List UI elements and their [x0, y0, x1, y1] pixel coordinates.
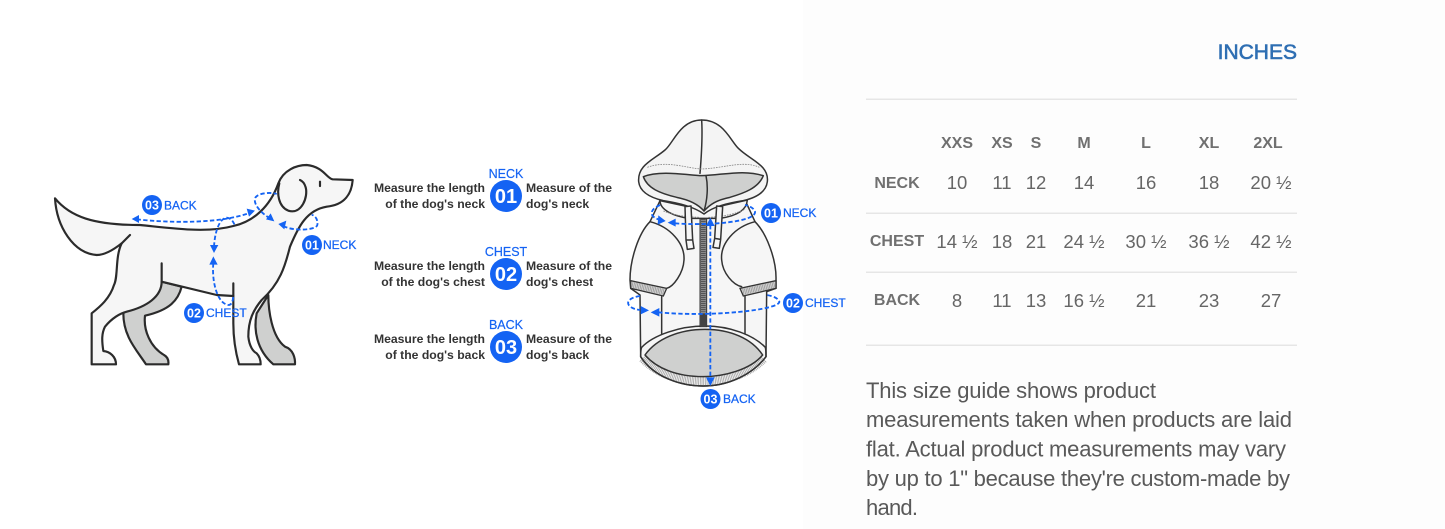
table row: chest: 42 ½ — [1250, 231, 1292, 252]
hoodie hem rib — [643, 358, 764, 381]
size guide note: by up to 1" because they're custom-made by — [866, 466, 1290, 491]
table row: neck: NECK — [874, 175, 920, 192]
instruction: back — [374, 318, 612, 363]
left drawstring — [685, 206, 694, 249]
badge: 02 chest — [783, 293, 846, 313]
table row: chest: 14 ½ — [936, 231, 978, 252]
size guide note — [866, 378, 1292, 520]
table row: neck: 10 — [947, 172, 967, 193]
size guide note: This size guide shows product — [866, 378, 1156, 403]
neck arrow — [652, 205, 755, 227]
table row: chest: 18 — [992, 231, 1012, 252]
dog eye — [317, 182, 323, 186]
instruction: chest: dog's chest — [526, 275, 593, 289]
hoodie zipper — [700, 218, 707, 327]
instruction: neck: dog's neck — [526, 197, 589, 211]
instruction: chest: of the dog's chest — [381, 275, 485, 289]
illustration: dog with measurement guides — [55, 165, 356, 364]
table row: neck: 14 — [1074, 172, 1094, 193]
hoodie hem opening — [645, 329, 763, 377]
right drawstring — [713, 206, 723, 248]
size guide note: measurements taken when products are laid — [866, 407, 1292, 432]
instruction: neck: NECK — [489, 167, 524, 181]
table header row: M — [1077, 135, 1091, 152]
table row: chest: 24 ½ — [1063, 231, 1105, 252]
table header row: 2XL — [1253, 135, 1283, 152]
table row: back: 8 — [952, 290, 962, 311]
instruction: back: dog's back — [526, 348, 589, 362]
badge: 01 neck: NECK — [323, 238, 356, 252]
hood seams — [700, 120, 707, 211]
chest arrow — [209, 218, 235, 305]
badge: 02 chest: CHEST — [805, 296, 846, 310]
table row: back: 11 — [992, 290, 1012, 311]
table row: chest: 30 ½ — [1125, 231, 1167, 252]
legend: measurement instructions — [374, 167, 612, 363]
hoodie sleeve lines — [650, 222, 755, 333]
heading: inches: INCHES — [1218, 41, 1297, 64]
instruction: chest: 02 — [495, 264, 517, 286]
badge: 03 back: 03 — [145, 198, 159, 212]
hoodie hem outline — [641, 326, 766, 386]
badge: 03 back: BACK — [723, 392, 756, 406]
dog ear — [278, 180, 306, 211]
badge: 01 neck — [302, 235, 356, 255]
left cuff — [631, 281, 667, 296]
table row: neck: 18 — [1199, 172, 1219, 193]
back arrow — [132, 209, 255, 223]
table row: neck: 16 — [1136, 172, 1156, 193]
hood — [639, 120, 767, 214]
size table — [866, 98, 1297, 346]
table row: chest: 21 — [1026, 231, 1046, 252]
table row: back: BACK — [874, 292, 921, 309]
table header row: S — [1031, 135, 1042, 152]
badge: 03 back: 03 — [704, 392, 717, 406]
size guide note: hand. — [866, 495, 918, 520]
hoodie body — [630, 200, 776, 386]
instruction: back: 03 — [495, 337, 517, 359]
badge: 01 neck: NECK — [783, 206, 816, 220]
back arrow — [706, 218, 715, 386]
instruction: neck: of the dog's neck — [385, 197, 485, 211]
illustration: hoodie with measurement guides — [628, 120, 846, 409]
neck arrow — [255, 193, 318, 230]
badge: 03 back — [700, 389, 756, 409]
instruction: neck: Measure of the — [526, 181, 612, 195]
table row: back: 16 ½ — [1063, 290, 1105, 311]
table header row: XL — [1199, 135, 1219, 152]
table row: neck: 20 ½ — [1250, 172, 1292, 193]
table row: back: 27 — [1261, 290, 1281, 311]
table row: chest — [870, 231, 1292, 252]
instruction: neck: 01 — [495, 186, 517, 208]
table row: back: 23 — [1199, 290, 1219, 311]
hood opening — [643, 173, 763, 211]
badge: 02 chest: 02 — [187, 306, 201, 320]
instruction: neck: Measure the length — [374, 181, 485, 195]
size guide note: flat. Actual product measurements may vary — [866, 436, 1286, 462]
table row: neck — [874, 172, 1292, 193]
badge: 02 chest — [184, 303, 247, 323]
table row: chest: 36 ½ — [1188, 231, 1230, 252]
table row: neck: 11 — [992, 172, 1012, 193]
instruction: neck — [374, 167, 612, 212]
instruction: chest: CHEST — [485, 245, 528, 259]
table row: neck: 12 — [1026, 172, 1046, 193]
table header row — [941, 135, 1283, 152]
instruction: back: Measure of the — [526, 332, 612, 346]
right cuff — [740, 281, 776, 296]
instruction: chest: Measure the length — [374, 259, 485, 273]
badge: 01 neck: 01 — [305, 238, 319, 252]
dog hind far leg — [123, 282, 182, 364]
badge: 03 back: BACK — [164, 198, 197, 212]
dog front far leg — [256, 295, 295, 364]
badge: 01 neck: 01 — [764, 206, 778, 220]
instruction: chest: Measure of the — [526, 259, 612, 273]
hoodie collar — [660, 200, 747, 218]
badge: 02 chest: CHEST — [206, 306, 247, 320]
table header row: XS — [991, 135, 1013, 152]
table header row: XXS — [941, 135, 973, 152]
dog body — [55, 165, 353, 364]
table header row: L — [1141, 135, 1151, 152]
table row: chest: CHEST — [870, 233, 924, 250]
instruction: chest — [374, 245, 612, 290]
badge: 01 neck — [761, 203, 816, 223]
table row: back: 13 — [1026, 290, 1046, 311]
badge: 03 back — [142, 195, 197, 215]
table row: back: 21 — [1136, 290, 1156, 311]
instruction: back: Measure the length — [374, 332, 485, 346]
instruction: back: BACK — [489, 318, 524, 332]
chest arrow — [628, 295, 779, 317]
table row: back — [874, 290, 1281, 311]
badge: 02 chest: 02 — [786, 296, 800, 310]
instruction: back: of the dog's back — [385, 348, 485, 362]
dog detail lines — [122, 235, 233, 296]
